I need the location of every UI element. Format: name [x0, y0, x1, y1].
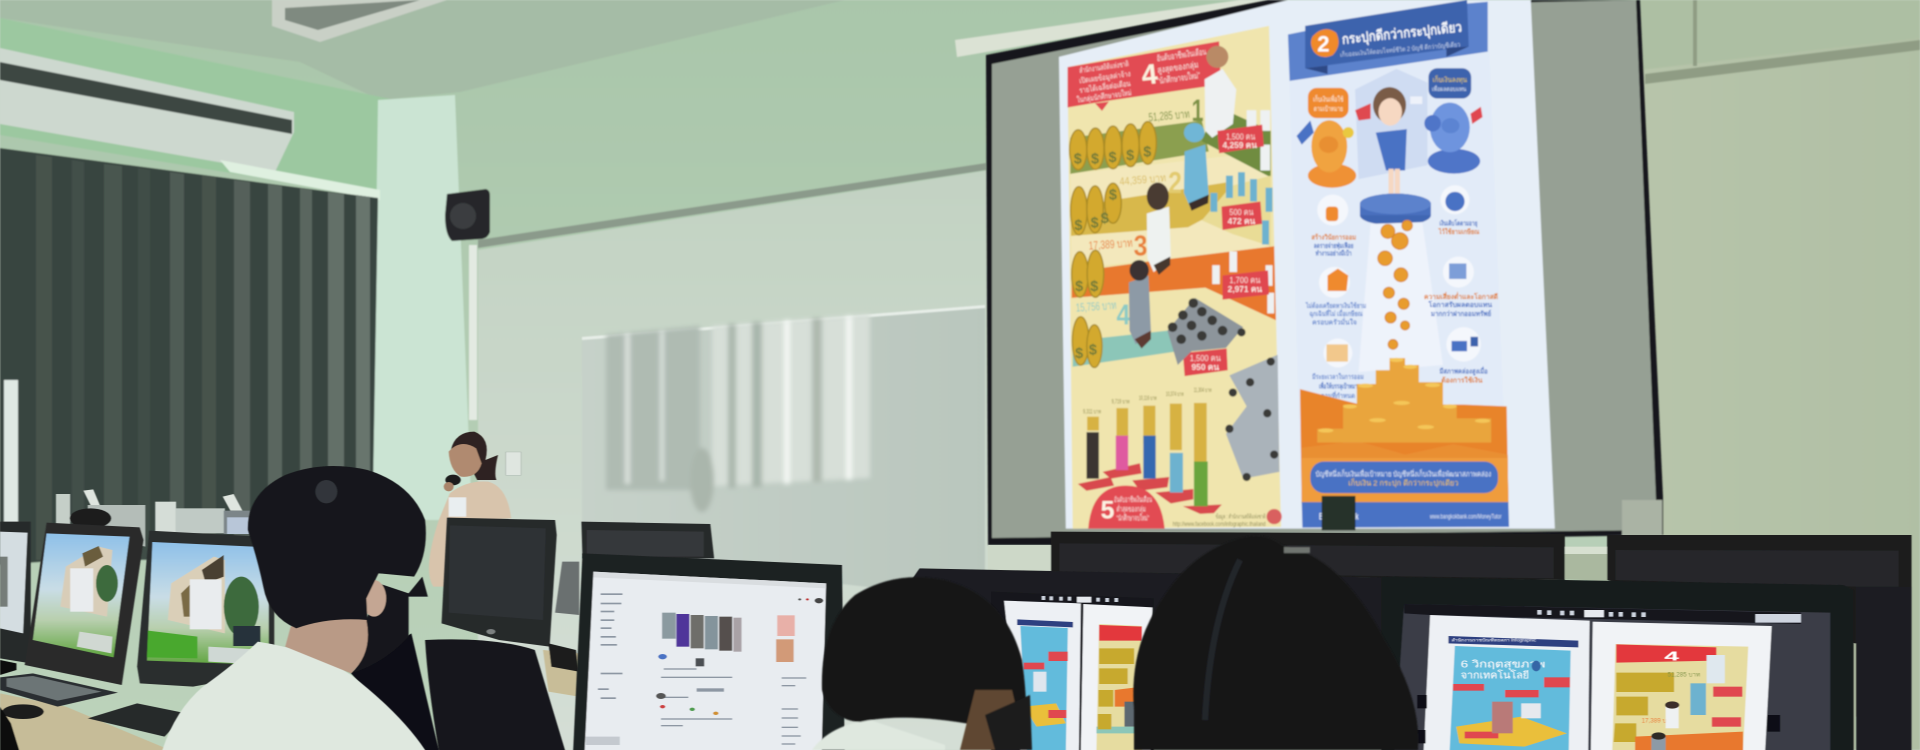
screen black frame [986, 0, 1663, 545]
red banner: เปิดเผยข้อมูลค่าจ้าง [1079, 69, 1131, 85]
gold coin stacks: $ [1075, 279, 1083, 295]
hair [451, 432, 498, 480]
source credit [1173, 509, 1282, 528]
benefit text right: ต้องการใช้เงิน [1441, 375, 1483, 384]
tag labels: 4,259 คน [1223, 141, 1257, 150]
tag labels: 1,500 คน [1226, 132, 1256, 141]
keyboards and mouse [0, 673, 186, 750]
bank footer: Bangkok Bank [1319, 511, 1359, 521]
sidebar and feed lines [598, 593, 806, 745]
pale blue panel [1288, 3, 1508, 527]
cream band [1070, 152, 1271, 269]
blue piggy bank: เพื่อผลตอบแทน [1432, 85, 1466, 93]
taskbar [586, 737, 620, 745]
black office chair [425, 639, 565, 750]
benefit text right: ความเสี่ยงต่ำและโอกาสดี [1424, 291, 1499, 301]
hair mass [1133, 536, 1418, 750]
rank 2 band: 2 [1168, 167, 1182, 200]
blue piggy bank [1424, 68, 1483, 174]
skin and mask [960, 690, 1026, 750]
benefit text right: มีสภาพคล่องสูงเมื่อ [1439, 366, 1488, 377]
student foreground centre (masked) [812, 577, 1032, 750]
red semicircle: lowest five title: "นักศึกษาจบใหม่" [1116, 514, 1149, 523]
blue conclusion pill: เก็บเงิน 2 กระปุก ดีกว่ากระปุกเดียว [1348, 478, 1458, 488]
desk right part [543, 650, 579, 697]
gold coin stacks: $ [1091, 152, 1099, 168]
red banner: 4 [1140, 57, 1159, 91]
ceiling light [272, 0, 447, 42]
rank 2 band: 44,359 บาท [1119, 172, 1166, 188]
blue conclusion pill [1310, 461, 1498, 493]
blue ribbon header [1288, 0, 1488, 81]
far left monitor [0, 522, 31, 675]
blue platform [1360, 194, 1431, 226]
pale ledge behind monitors [988, 545, 1051, 572]
rear monitors right [988, 532, 1912, 750]
people figures [1129, 46, 1274, 349]
benefit text right [1424, 219, 1499, 384]
projected slide, drawn in zoomed coordinates [1059, 0, 1555, 530]
bank footer [1302, 502, 1509, 528]
red banner: สูงสุดของกลุ่ม [1157, 59, 1199, 76]
rank 1 band: 1 [1192, 92, 1204, 128]
black area beside student [351, 633, 439, 750]
paper held [449, 497, 466, 517]
red banner: อันดับอาชีพเงินเดือน [1156, 46, 1207, 63]
red info tags [1183, 125, 1269, 376]
desk surface [0, 693, 170, 750]
benefit text right: ไว้ใช้ยามเกษียณ [1438, 227, 1480, 236]
right open page [1591, 622, 1772, 750]
wall thermostat [506, 452, 521, 475]
top rail above screen [955, 0, 1290, 57]
left wall upper green [0, 18, 395, 200]
tag labels: 2,971 คน [1228, 285, 1262, 294]
ad images [776, 615, 795, 662]
benefit text left: ตามที่กำหนด [1321, 390, 1356, 400]
benefit icons [1317, 185, 1481, 367]
rank 3 band: 3 [1134, 231, 1147, 263]
left monitor screen [991, 592, 1154, 750]
red semicircle: lowest five title: อันดับอาชีพเงินเดือน [1114, 495, 1152, 504]
tag labels: 1,700 คน [1229, 276, 1261, 285]
wall band between monitors [1565, 554, 1607, 581]
right open page: 4 [1664, 649, 1679, 664]
presenter [429, 432, 521, 587]
woman figure [1355, 87, 1422, 195]
cables [549, 643, 579, 672]
blue conclusion pill: บัญชีหนึ่งเก็บเงินเพื่อเป้าหมาย บัญชีหนึ่งเก็บเงินเพื่อพัฒนาสภาพคล่อง [1316, 468, 1491, 478]
reaction buttons [656, 598, 823, 715]
benefit text right: มากกว่าฝากออมทรัพย์ [1431, 310, 1491, 318]
blue ribbon header: 2 [1317, 32, 1329, 57]
gold coin stacks: $ [1089, 343, 1097, 359]
right infographic: two piggy banks [1288, 0, 1509, 530]
projector screen [986, 0, 1663, 545]
monitor with campus wallpaper 1 [25, 523, 144, 685]
left infographic: salary ranking [1068, 26, 1282, 529]
tag labels: 472 คน [1228, 217, 1256, 226]
rank 3 band: 17,389 บาท [1088, 237, 1133, 253]
lowest five salary figures with coin columns: 9,719 บาท [1112, 399, 1130, 406]
right wall [1640, 0, 1920, 750]
grey bracket on screen right [1622, 500, 1662, 536]
main screen dark area [1394, 604, 1830, 750]
bank footer: www.bangkokbank.com/MoneyTutor [1429, 514, 1501, 521]
air conditioner [0, 48, 380, 200]
horizontal rail [478, 163, 986, 248]
lowest five salary figures with coin columns: 10,116 บาท [1139, 395, 1157, 402]
hair highlight [315, 480, 337, 503]
ceiling [0, 0, 845, 100]
back wall lower [478, 170, 990, 750]
centre black monitor [442, 518, 557, 647]
gold coin stacks: $ [1074, 152, 1082, 168]
left monitor bezel [900, 568, 1420, 643]
gold coin stacks: $ [1109, 188, 1117, 204]
rank 4 band: 15,756 บาท [1075, 299, 1117, 315]
blue ribbon header: เก็บออมเงินให้ตอบโจทย์ชีวิต 2 บัญชี ดีกว่าบัญชีเดียว [1340, 39, 1461, 59]
gold coin stacks: $ [1109, 150, 1117, 166]
rank 4 band [1073, 299, 1178, 367]
loudspeaker [445, 189, 490, 241]
tag labels [1190, 132, 1262, 372]
source credit: ข้อมูล : สำนักงานสถิติแห่งชาติ [1216, 512, 1266, 520]
lowest five salary figures with coin columns: 10,374 บาท [1166, 391, 1184, 398]
story thumbnails [662, 613, 742, 652]
orange piggy bank: เก็บเงินเพื่อใช้ [1313, 95, 1344, 104]
vertical conduit [469, 245, 477, 420]
red semicircle: lowest five title: 5 [1101, 497, 1115, 524]
benefit text left: ไม่ต้องเครียดหาเงินใช้ยาม [1305, 301, 1366, 310]
student foreground right hair [1133, 536, 1418, 750]
gold coin stacks: $ [1101, 211, 1109, 227]
tag labels: 500 คน [1229, 208, 1254, 217]
benefit text left: สร้างวินัยการออม [1311, 232, 1357, 241]
student foreground left [162, 466, 428, 750]
microphone and hand [444, 475, 461, 491]
whiteboard with window reflection [582, 305, 985, 600]
red banner: "นักศึกษาจบใหม่" [1157, 70, 1201, 86]
rear monitor right [1607, 535, 1912, 750]
hairclip glint [1284, 547, 1310, 553]
light beam [1359, 222, 1443, 372]
red banner: ในกลุ่มนักศึกษาจบใหม่ [1076, 88, 1132, 105]
orange piggy bank [1297, 88, 1356, 188]
orange hills and gold pile [1300, 358, 1508, 503]
dark clip on screen [1322, 496, 1355, 530]
lowest five salary figures with coin columns [1078, 387, 1222, 514]
right wall upper panels [1640, 0, 1920, 84]
benefit text left: ครอบครัวมั่นใจ [1312, 316, 1357, 326]
lowest five salary figures with coin columns: 9,311 บาท [1083, 408, 1101, 415]
benefit text right: เงินเติบโตตามอายุ [1439, 219, 1477, 228]
tag labels: 1,500 คน [1190, 354, 1221, 363]
left open page [1424, 615, 1590, 750]
red semicircle: lowest five title [1088, 486, 1165, 529]
red semicircle: lowest five title: ต่ำสุดของกลุ่ม [1116, 503, 1146, 513]
benefit text left [1305, 232, 1366, 400]
gold coin stacks: $ [1126, 148, 1134, 164]
browser bar [593, 572, 826, 588]
blouse [429, 481, 511, 587]
hair [248, 466, 426, 628]
rank 3 band [1072, 231, 1276, 320]
building backdrop [1355, 69, 1427, 179]
yellow panel [1068, 26, 1281, 529]
left open page: สำนักงานราชบัณฑิตยสภา Infographic [1452, 637, 1537, 643]
face [449, 444, 482, 477]
rank 1 band: 51,285 บาท [1148, 108, 1190, 124]
benefit text left: ลดรายจ่ายฟุ่มเฟือย [1314, 242, 1353, 250]
white slide [1059, 0, 1555, 529]
computer monitors left rows [0, 489, 714, 750]
rear monitor centre [1051, 532, 1607, 580]
hair [822, 577, 1026, 750]
benefit text left: ฉุกเฉินที่ไม่ เมื่อเกษียณ [1309, 308, 1363, 318]
foreground monitors right showing e-book [900, 568, 1854, 750]
monitor with campus wallpaper 2 [137, 531, 274, 687]
window blinds [0, 148, 378, 565]
big foreground monitor with social media feed [573, 553, 845, 750]
benefit text left: ทำงานอย่างมีเป้า [1316, 249, 1352, 258]
black mask [351, 577, 428, 673]
far back row monitors [56, 489, 250, 547]
falling coins [1378, 220, 1412, 349]
gold coin stacks: $ [1090, 279, 1098, 295]
side scroll buttons [1416, 695, 1780, 743]
blue ribbon header: กระปุกดีกว่ากระปุกเดียว [1341, 20, 1463, 48]
white shirt [162, 642, 425, 750]
screen [585, 572, 826, 750]
right open page: 17,389 บาท [1642, 718, 1674, 724]
tag labels: 950 คน [1192, 363, 1219, 372]
gold coin stacks: $ [1143, 145, 1151, 161]
source credit: http://www.facebook.com/infographic.thailand [1173, 521, 1266, 528]
right open page: 51,285 บาท [1668, 672, 1700, 678]
grey laptop [555, 562, 579, 615]
toolbar [1404, 604, 1801, 624]
monitor bezel [573, 553, 845, 750]
pillar by window [372, 95, 472, 520]
gold coin stacks: $ [1091, 215, 1099, 231]
benefit text left: เพื่อให้บรรลุเป้าหมาย [1319, 380, 1360, 390]
ear [362, 580, 386, 617]
gold coin stacks: $ [1074, 218, 1082, 234]
rank 4 band: 4 [1116, 299, 1130, 331]
left open page: 6 วิกฤตสุขภาพ [1461, 659, 1545, 671]
red banner: รายได้เฉลี่ยต่อเดือน [1078, 78, 1131, 95]
benefit text right: โอกาสรับผลตอบแทน [1427, 300, 1492, 309]
lowest five salary figures with coin columns: 11,304 บาท [1194, 387, 1212, 394]
rank 1 band [1070, 92, 1271, 177]
screen grey border [992, 0, 1656, 538]
orange piggy bank: ตามเป้าหมาย [1314, 105, 1343, 113]
red banner [1068, 41, 1221, 111]
neck [285, 607, 384, 673]
crowd of graduates [1167, 298, 1279, 481]
red banner: สำนักงานสถิติแห่งชาติ [1079, 59, 1129, 75]
rear black monitor [581, 522, 714, 558]
gold coin stacks [1070, 122, 1156, 367]
blue piggy bank: เก็บเงินลงทุน [1433, 75, 1467, 84]
white shirt [812, 720, 945, 750]
rank 2 band [1071, 167, 1271, 246]
hair sheen [1205, 560, 1240, 720]
main monitor bezel [1381, 577, 1854, 750]
gold coin stacks: $ [1075, 346, 1083, 362]
benefit text left: มีระยะเวลาในการออม [1312, 372, 1364, 381]
left open page: จากเทคโนโลยี [1461, 670, 1529, 681]
